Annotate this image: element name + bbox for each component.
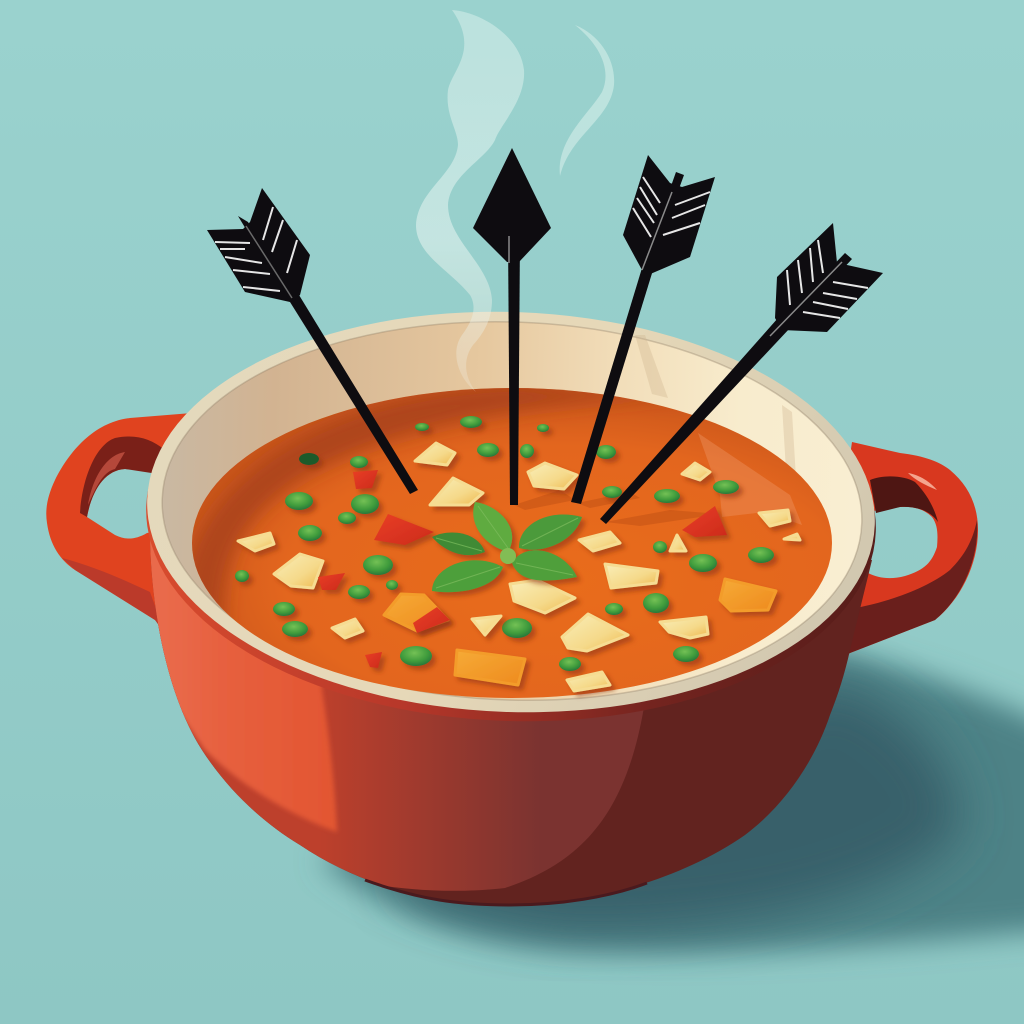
pot inner wall <box>156 310 868 712</box>
small steam wisp <box>560 25 614 176</box>
body reflection <box>120 540 655 891</box>
handle outer <box>823 442 978 668</box>
arrow 4 <box>600 223 883 524</box>
arrow 3 <box>571 155 715 504</box>
basil leaf top <box>473 502 512 552</box>
steam <box>416 10 614 392</box>
soup light patch <box>698 433 802 525</box>
arrow entry shadows <box>514 490 720 526</box>
wall shadow stripes <box>635 335 796 478</box>
potato chunks <box>238 443 800 691</box>
basil centre <box>500 548 516 564</box>
basil leaves <box>432 502 582 592</box>
basil leaf left <box>432 532 485 555</box>
handle lower shade <box>62 558 165 634</box>
handle dark underside <box>823 520 977 668</box>
handle inner dark <box>870 476 938 522</box>
handle outer <box>46 413 192 632</box>
pot body <box>150 540 872 904</box>
body dark right <box>150 544 872 904</box>
handle inner lit <box>88 452 125 505</box>
basil veins <box>436 506 578 588</box>
arrow 1 <box>207 188 418 494</box>
basil leaf lower left <box>432 560 503 592</box>
large steam plume <box>416 10 524 392</box>
orange chunks <box>384 579 776 685</box>
soup <box>180 385 832 698</box>
peas <box>235 416 774 671</box>
basil leaf lower right <box>512 550 577 581</box>
handle inner dark <box>80 436 165 517</box>
basil leaf upper right <box>519 515 582 550</box>
pot rim <box>140 299 882 725</box>
handle highlight <box>908 473 937 490</box>
left handle <box>46 413 192 634</box>
outer shadow <box>320 650 1024 952</box>
red pepper pieces <box>318 470 727 668</box>
arrows <box>207 148 883 524</box>
soup shaded edge <box>192 388 639 616</box>
right handle <box>823 442 978 668</box>
body left highlight <box>130 540 337 832</box>
soup surface <box>192 388 832 698</box>
arrow 2 <box>473 148 551 505</box>
pot shadow <box>320 650 1024 952</box>
pot lip <box>139 304 883 734</box>
core shadow <box>390 680 960 930</box>
body bottom edge <box>365 880 647 905</box>
